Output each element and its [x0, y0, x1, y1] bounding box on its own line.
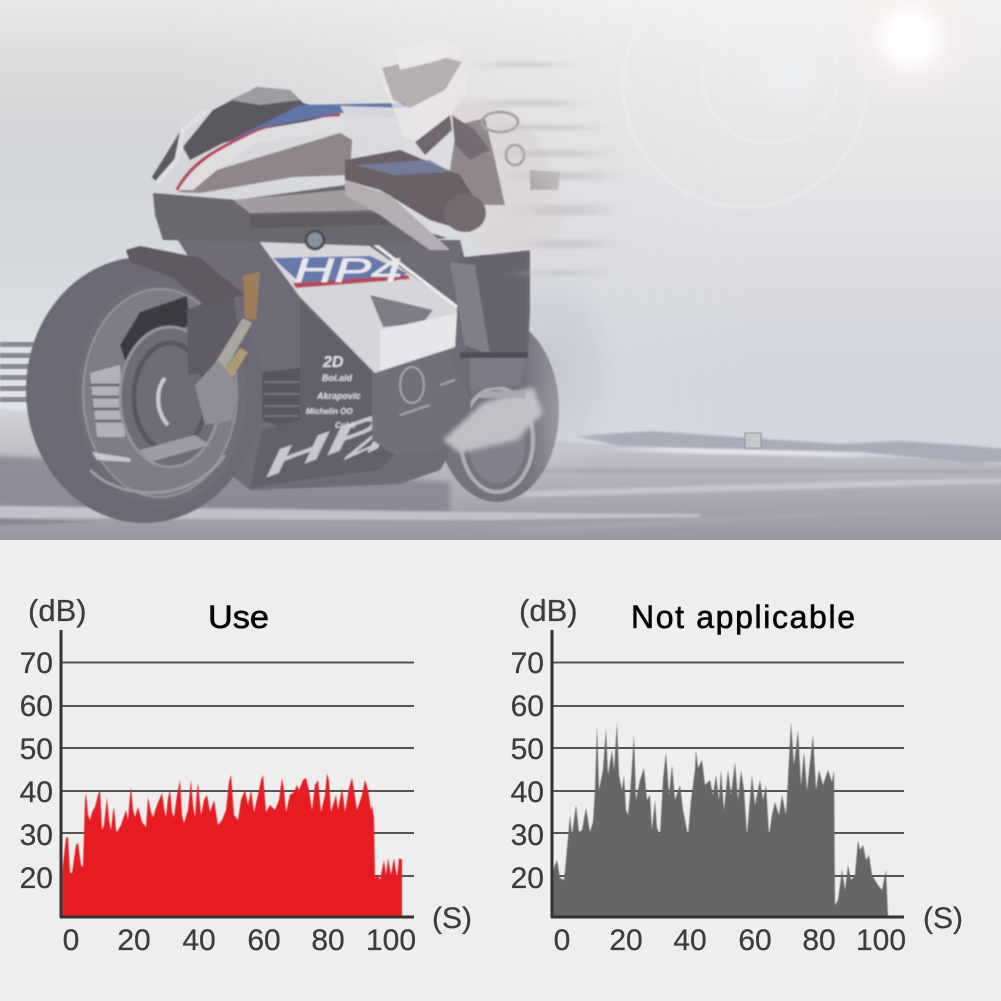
- headlamp: [152, 127, 183, 183]
- dark lower fairing with sponsors: [250, 300, 395, 488]
- x axis labels: 60: [738, 924, 772, 957]
- lower white highlight: [380, 313, 457, 370]
- rear wheel: [445, 331, 560, 502]
- haze behind tail: [530, 300, 598, 438]
- axes: [551, 630, 904, 918]
- y axis labels: 30: [20, 819, 53, 852]
- chart: Not applicable: [511, 593, 963, 957]
- sponsor labels: 2D: [322, 354, 344, 371]
- radiator: [262, 368, 300, 426]
- front rim: [81, 287, 239, 499]
- rim dark top gap: [120, 296, 189, 361]
- x axis labels: 40: [182, 924, 216, 957]
- front fender: [126, 246, 245, 305]
- rider torso: [440, 100, 565, 253]
- lower fairing HP4 lettering: [266, 415, 380, 478]
- y axis labels: 70: [20, 647, 53, 680]
- fairing white edge: [157, 110, 207, 183]
- trackside railing: [0, 342, 35, 402]
- front tyre: [25, 257, 234, 524]
- title: Use: Use: [208, 599, 269, 635]
- rider upper body: [375, 24, 565, 253]
- y axis labels: [20, 647, 53, 895]
- red noise area: [62, 773, 402, 917]
- fork leg: [212, 272, 260, 378]
- gridlines: [553, 662, 904, 876]
- leg lower dark bar: [460, 352, 528, 358]
- upper fairing lower gray: [178, 133, 352, 193]
- white side panel: [258, 240, 457, 373]
- x axis labels: 100: [856, 924, 906, 957]
- x axis labels: 60: [247, 924, 281, 957]
- y axis unit: (dB): [519, 593, 578, 628]
- rider leg: [457, 250, 530, 357]
- x axis labels: 40: [673, 924, 707, 957]
- y axis labels: 60: [20, 690, 53, 723]
- chart: Use: [20, 593, 472, 957]
- x axis labels: 20: [609, 924, 643, 957]
- HP4 logo: HP4: [294, 252, 402, 290]
- x axis labels: 20: [117, 924, 151, 957]
- red stripe: [177, 115, 340, 190]
- lower fairing HP4 lettering: HP: [264, 405, 386, 486]
- y axis labels: 40: [20, 776, 53, 809]
- title: Not applicable: Not applicable: [631, 599, 855, 635]
- white tail of blue stripe: [340, 106, 412, 118]
- windscreen upper haze: [230, 87, 300, 105]
- engine cases: [371, 414, 390, 446]
- y axis labels: 50: [20, 733, 53, 766]
- suit logos: [482, 112, 524, 165]
- brake caliper: [195, 360, 238, 425]
- shoulder dark: [452, 115, 490, 160]
- helmet: [375, 24, 467, 155]
- shin: [470, 358, 502, 390]
- distant hills and building: [575, 431, 1001, 463]
- axes: [60, 630, 414, 918]
- lower fairing HP4 lettering: 4: [341, 420, 391, 470]
- y axis labels: 20: [511, 862, 544, 895]
- grey noise area: [553, 722, 888, 917]
- lower chart panel background: [0, 540, 1001, 1001]
- sponsor labels: Akrapovic: [316, 391, 361, 401]
- mid fairing: [153, 185, 447, 246]
- exhaust and boot highlight: [443, 387, 543, 453]
- side vent: [370, 295, 433, 327]
- sponsor labels: [306, 354, 361, 430]
- mid fairing slit: [250, 213, 390, 228]
- y axis labels: 70: [511, 647, 544, 680]
- y axis labels: 50: [511, 733, 544, 766]
- y axis labels: 60: [511, 690, 544, 723]
- lower spokes: [92, 452, 130, 462]
- sky background: [0, 0, 1001, 470]
- y axis labels: 20: [20, 862, 53, 895]
- y axis labels: 30: [511, 819, 544, 852]
- x axis unit: (S): [923, 902, 963, 935]
- x axis labels: [63, 924, 416, 957]
- x axis labels: 80: [311, 924, 345, 957]
- y axis unit: (dB): [28, 593, 87, 628]
- motorcycle: [26, 24, 565, 523]
- y axis labels: 40: [511, 776, 544, 809]
- rim see-through background: [90, 365, 125, 437]
- sponsor labels: Cobb: [335, 421, 356, 430]
- x axis labels: [554, 924, 906, 957]
- sponsor labels: Bol.aid: [322, 373, 353, 383]
- mid fairing plate: [233, 190, 380, 213]
- engine details: [400, 367, 455, 415]
- horizontal motion blur streaks: [490, 62, 600, 276]
- y axis labels: [511, 647, 544, 895]
- knee highlights: [450, 262, 490, 355]
- sponsor labels: Michelin OO: [306, 407, 353, 416]
- blue and red livery stripes: [273, 243, 457, 307]
- blue stripe: [225, 103, 410, 143]
- hub highlight: [158, 378, 168, 425]
- white stripe: [177, 115, 345, 190]
- road surface: [0, 410, 1001, 540]
- x axis unit: (S): [432, 902, 472, 935]
- x axis labels: 100: [366, 924, 416, 957]
- arm and tank area: [345, 150, 563, 253]
- photo: motorcycle on race track: [0, 0, 1001, 560]
- foot peg: [480, 390, 525, 398]
- fork bracket: [187, 290, 238, 375]
- x axis labels: 0: [554, 924, 570, 957]
- windscreen tint: [183, 87, 340, 160]
- x axis labels: 0: [63, 924, 79, 957]
- gridlines: [62, 662, 414, 876]
- brake disc: [120, 327, 220, 467]
- x axis labels: 80: [802, 924, 836, 957]
- chest shadow: [450, 118, 505, 205]
- knee armor dark: [530, 170, 560, 190]
- BMW roundel: [306, 231, 324, 249]
- sun glare and lens flare: [872, 4, 949, 80]
- base silhouette: [178, 240, 475, 490]
